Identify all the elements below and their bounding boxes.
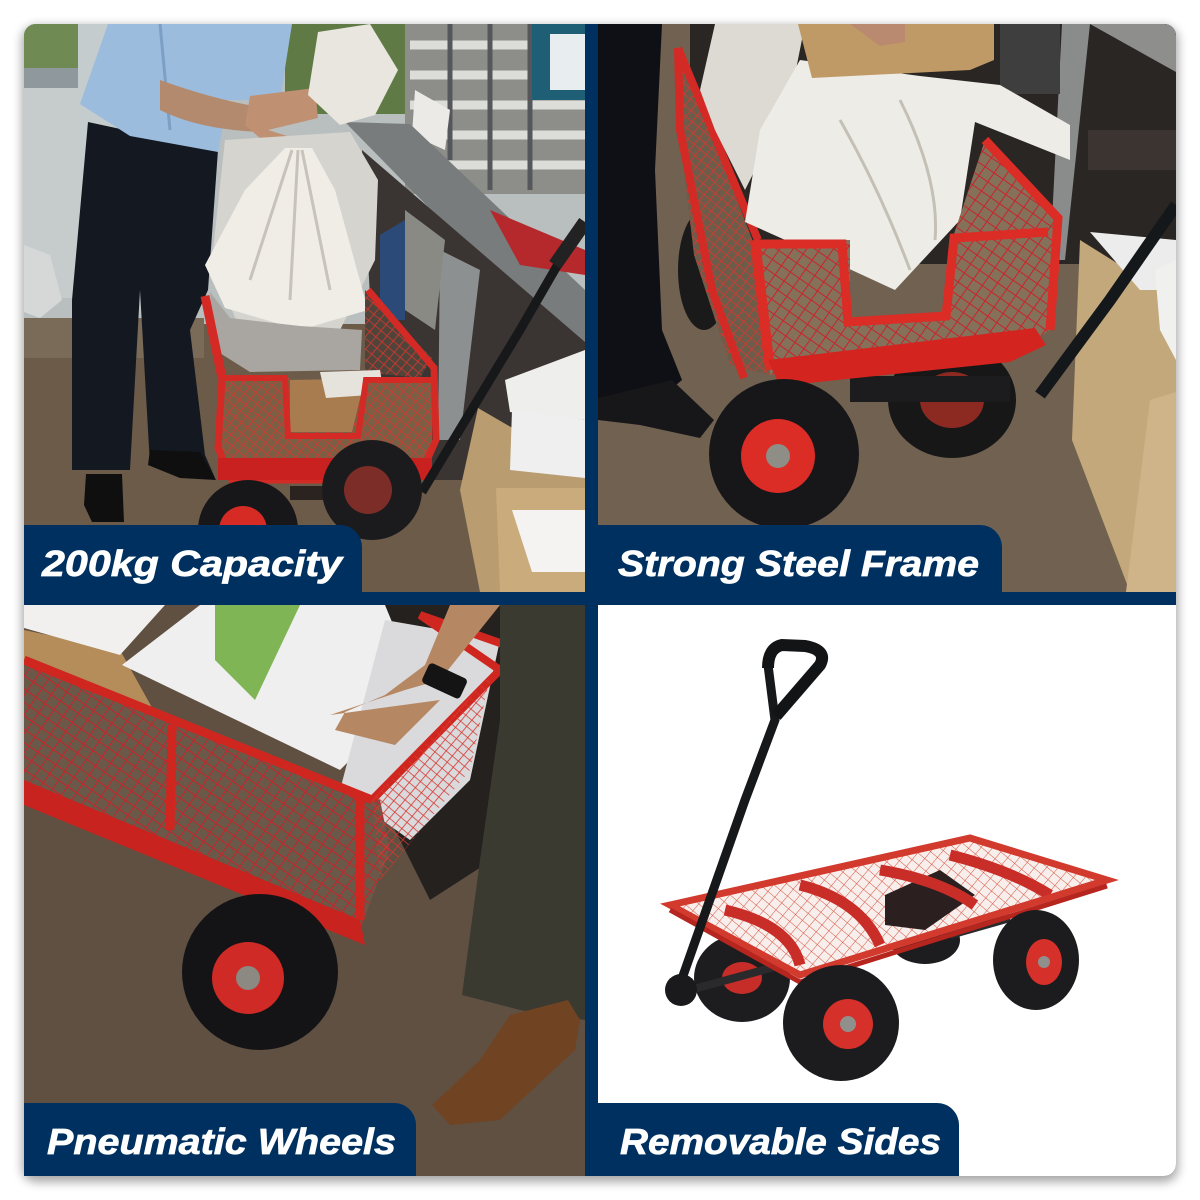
panel: pneumatic wheels photo [24,605,585,1176]
window and wall [24,24,585,358]
label: removable sides [586,1103,959,1176]
dark top background [385,605,500,900]
wagon deck [670,838,1107,982]
panel: removable sides product photo [598,605,1176,1176]
label: removable sides: Removable Sides [620,1121,941,1162]
label: strong steel frame [586,525,1002,592]
panel: strong steel frame photo [598,24,1176,592]
watch [422,663,467,698]
wheel [182,894,338,1050]
person shirt and arms [80,24,318,155]
label: 200kg capacity: 200kg Capacity [41,543,344,584]
cart front body [755,140,1060,386]
trousers [462,605,585,1020]
white paper top [24,605,165,655]
trousers [598,24,682,415]
label: pneumatic wheels: Pneumatic Wheels [47,1121,396,1162]
panel: 200kg capacity photo [24,24,585,592]
boxes right [1072,232,1176,592]
handle [1040,205,1176,395]
shoe [598,380,714,438]
cart far side [678,48,770,378]
dark background storage [690,24,1176,264]
back wheels [678,210,1016,458]
sacks [205,24,398,372]
person shoes [84,450,216,522]
shelving [405,24,585,194]
label: strong steel frame: Strong Steel Frame [618,543,979,584]
front wheel [709,379,859,529]
cart mesh side [24,615,520,945]
wagon front wheel [783,965,899,1081]
cart red mesh body with box [205,290,436,480]
wheels [198,440,422,540]
hand and arm [330,605,500,745]
person trousers [72,122,218,478]
cartons and envelopes [460,350,585,592]
brown shoe [432,1000,580,1125]
wagon axle [690,918,1010,990]
label: 200kg capacity [24,525,362,592]
desk [345,122,585,480]
label: pneumatic wheels [24,1103,416,1176]
sacks and box [700,24,1070,290]
wagon side wheel [993,910,1079,1010]
white product box [122,605,500,840]
wagon handle [665,645,822,1006]
cardboard box [24,630,152,706]
wagon rear wheels [694,932,960,1022]
cart handle [422,264,560,494]
